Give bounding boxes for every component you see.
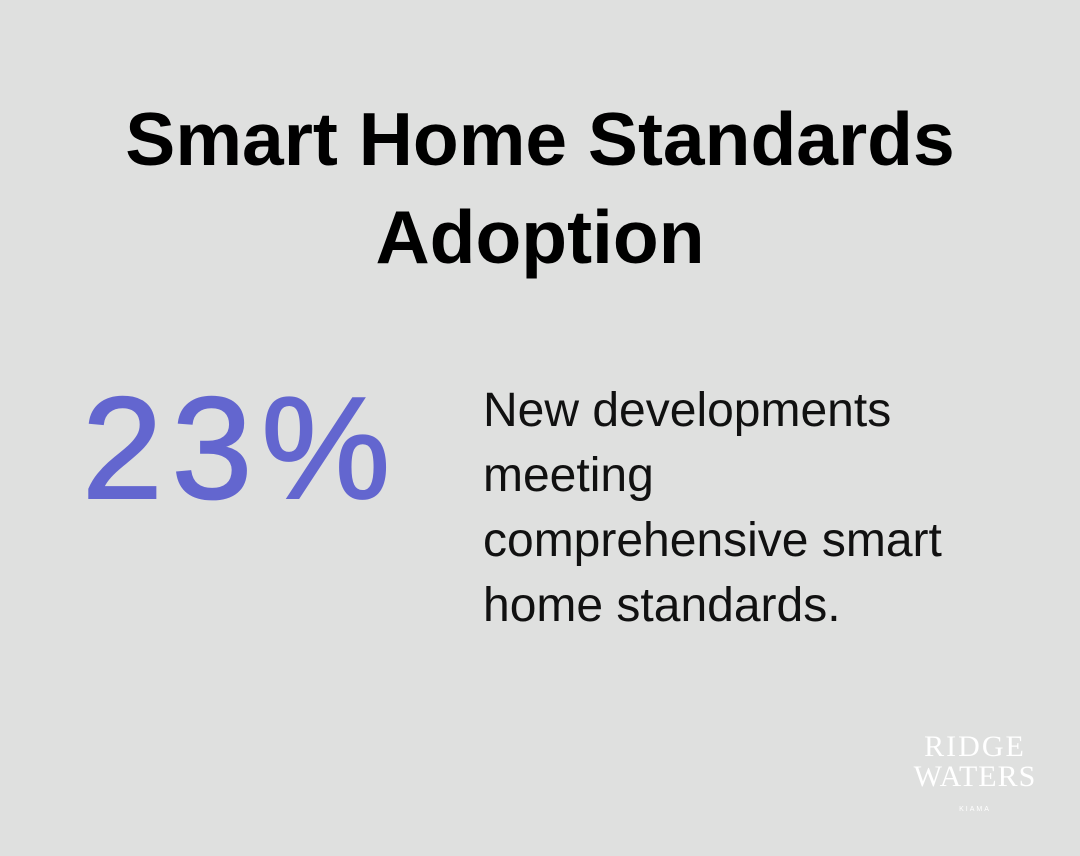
logo <box>914 730 1036 813</box>
title <box>125 97 955 279</box>
description text <box>483 384 942 632</box>
description text: meeting <box>483 449 654 502</box>
description text: comprehensive smart <box>483 514 942 567</box>
logo: KIAMA <box>959 806 991 813</box>
logo: RIDGE <box>924 730 1026 763</box>
title: Adoption <box>375 195 705 279</box>
logo: WATERS <box>914 760 1036 793</box>
title: Smart Home Standards <box>125 97 955 181</box>
description text: New developments <box>483 384 891 437</box>
description text: home standards. <box>483 579 841 632</box>
big stat: 23% <box>82 367 399 529</box>
